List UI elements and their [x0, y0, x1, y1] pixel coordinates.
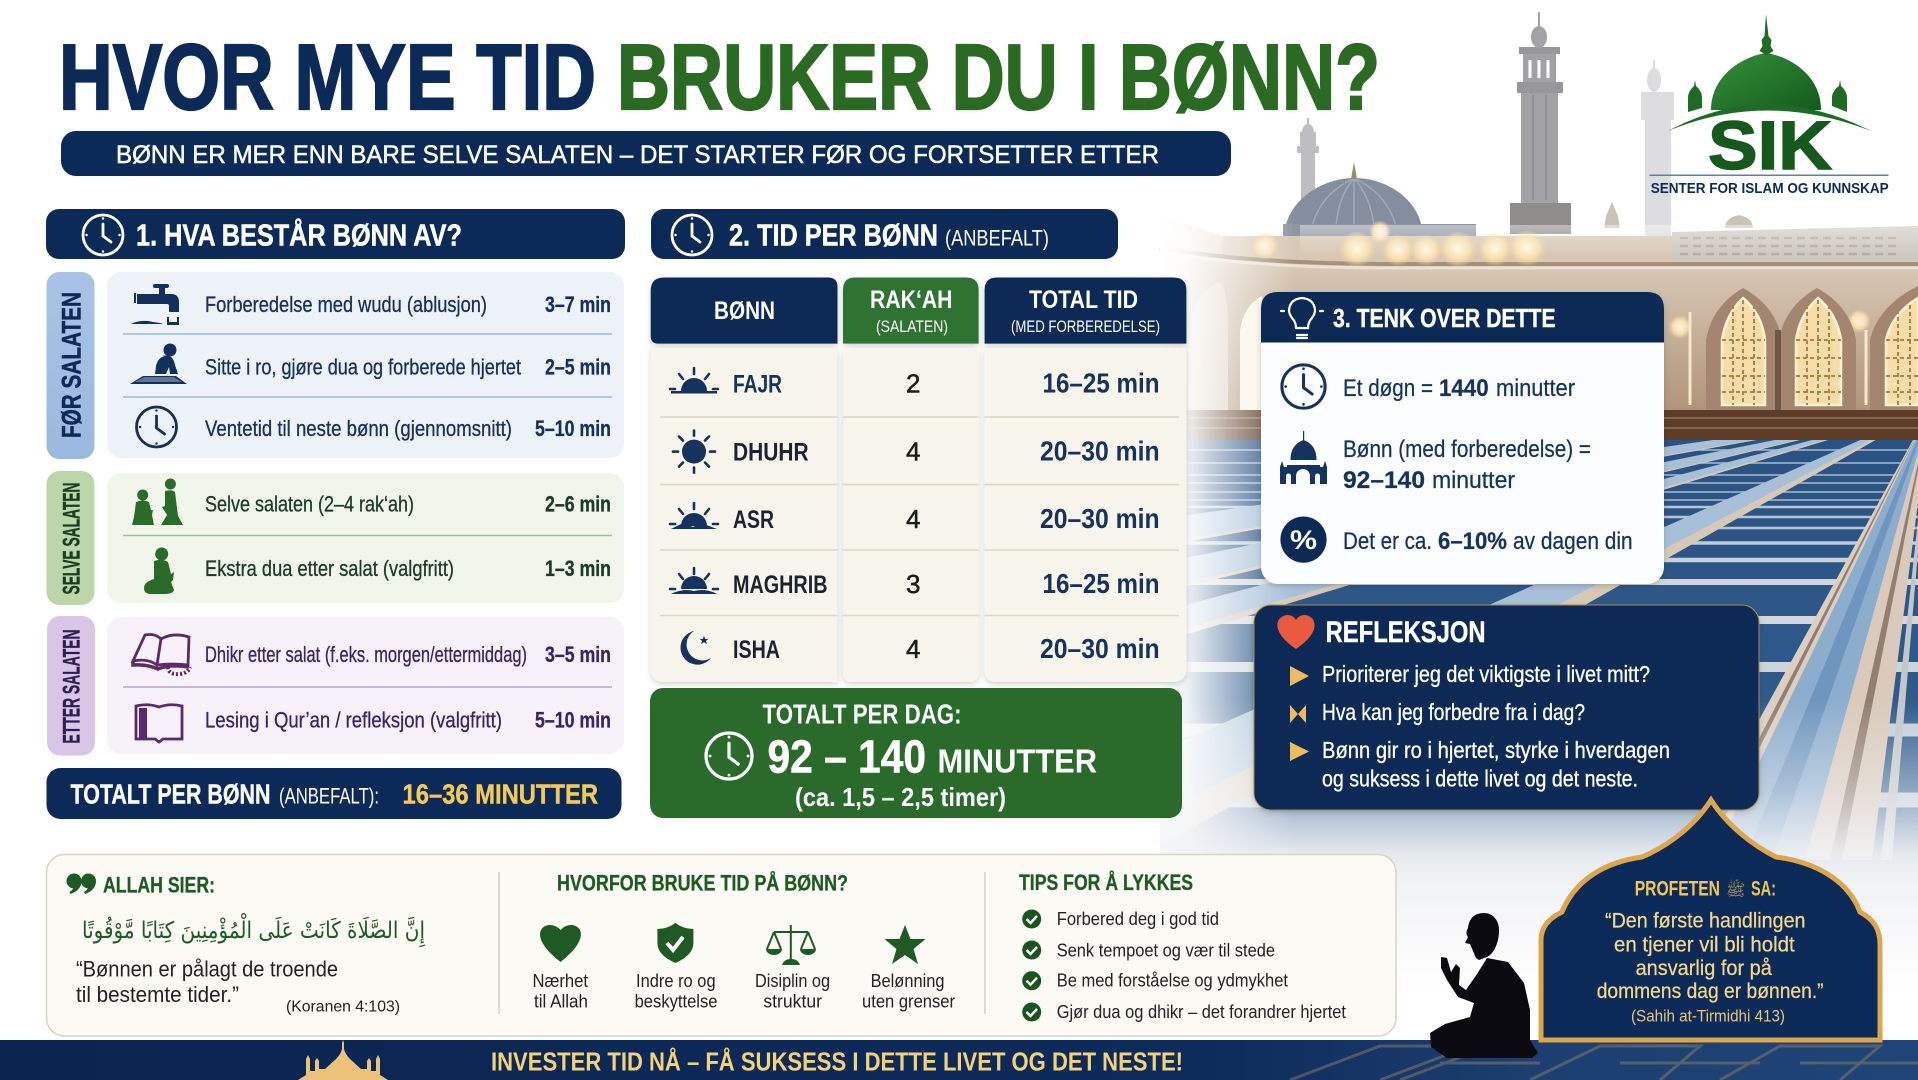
benefit: discipline: struktur: [763, 991, 822, 1012]
quote: allah sier: til bestemte tider.”: [76, 982, 239, 1007]
panel: selve salaten: [46, 471, 624, 605]
reflection question 1: Prioriterer jeg det viktigste i livet mitt?: [1322, 661, 1650, 687]
stripe bundles: [1186, 440, 1876, 792]
tip 4: Gjør dua og dhikr – det forandrer hjertet: [1057, 1002, 1346, 1022]
fact: prayer minutes: [1280, 431, 1591, 494]
arch: prophet quote: PROFETEN: [1635, 878, 1720, 901]
fact: prayer minutes: 92–140: [1343, 467, 1425, 494]
bottom banner: INVESTER TID NÅ – FÅ SUKSESS I DETTE LIVET OG DET NESTE!: [491, 1046, 1183, 1076]
arch: prophet quote: (Sahih at-Tirmidhi 413): [1631, 1007, 1785, 1026]
panel: etter salaten: [47, 616, 624, 756]
icon: clock: [706, 733, 752, 779]
tip 2: Senk tempoet og vær til stede: [1057, 941, 1275, 961]
arch: prophet quote: [1541, 800, 1880, 1040]
reflection statement: og suksess i dette livet og det neste.: [1322, 766, 1638, 792]
icon: moon and star: [681, 631, 711, 665]
quote: allah sier: (Koranen 4:103): [286, 999, 400, 1016]
row: dhikr: 3–5 min: [545, 642, 611, 667]
total per prayer bar: 16–36 MINUTTER: [402, 778, 598, 810]
row: isha: 4: [906, 634, 920, 664]
total per day box: TOTALT PER DAG:: [762, 698, 962, 730]
panel: allah sier / hvorfor / tips: [46, 854, 1396, 1036]
icon: sunset: [670, 568, 718, 594]
benefit: closeness: til Allah: [534, 991, 588, 1012]
why spend time on prayer: [532, 870, 955, 1012]
arch: prophet quote: dommens dag er bønnen.”: [1597, 979, 1824, 1003]
table header: RAK‘AH: [870, 286, 952, 314]
row: isha: ISHA: [733, 636, 780, 664]
tips for success: [1019, 869, 1346, 1022]
tab: selve salaten: SELVE SALATEN: [58, 483, 86, 594]
section 2 heading: 2. TID PER BØNN: [729, 218, 938, 252]
row: wudu: Forberedelse med wudu (ablusjon): [205, 292, 487, 317]
fact: prayer minutes: Bønn (med forberedelse) =: [1343, 436, 1591, 463]
total per prayer bar: [46, 768, 622, 819]
fact: percent of day: av dagen din: [1513, 528, 1633, 555]
fact: minutes per day: minutter: [1496, 375, 1575, 402]
fact: minutes per day: 1440: [1439, 375, 1489, 402]
title: BRUKER DU I BØNN?: [617, 25, 1380, 129]
row: lesing: 5–10 min: [535, 708, 611, 732]
panel: refleksjon: REFLEKSJON: [1326, 616, 1486, 649]
row: fajr: 2: [906, 369, 920, 399]
steps: [1160, 410, 1918, 441]
fact: minutes per day: [1282, 365, 1575, 408]
arch: prophet quote: ansvarlig for på: [1636, 956, 1772, 980]
total per day box: MINUTTER: [938, 742, 1097, 780]
icon: green dome: [1668, 14, 1871, 131]
benefit: inner peace: beskyttelse: [635, 991, 718, 1012]
benefit: closeness: Nærhet: [532, 970, 588, 991]
icon: book: [136, 705, 182, 742]
arch: prophet quote: SA:: [1751, 878, 1776, 901]
row: maghrib: [670, 568, 1160, 599]
fact: percent of day: [1280, 517, 1633, 563]
row: selve salaten: Selve salaten (2–4 rak‘ah): [205, 492, 414, 516]
pale left arch: [1188, 282, 1262, 430]
row: lesing: Lesing i Qur’an / refleksjon (valgfritt): [205, 708, 502, 732]
minaret: far left: [1297, 118, 1319, 212]
row: wudu: 3–7 min: [545, 292, 611, 317]
row: dhuhr: DHUHR: [733, 439, 809, 467]
row: maghrib: MAGHRIB: [733, 571, 828, 599]
balustrade lamps: [1251, 220, 1871, 339]
row: asr: 20–30 min: [1040, 503, 1160, 534]
minaret: centre: [1510, 12, 1571, 234]
fact: prayer minutes: minutter: [1432, 467, 1515, 494]
table body: [651, 348, 1186, 682]
quote: allah sier: إِنَّ الصَّلَاةَ كَانَتْ عَلَى الْمُؤْمِنِينَ كِتَابًا مَّوْقُوتًا: [82, 912, 426, 948]
fact: minutes per day: Et døgn =: [1343, 375, 1433, 402]
benefit: discipline: Disiplin og: [755, 970, 830, 991]
tip 3: Be med forståelse og ydmykhet: [1057, 971, 1288, 991]
glowing arched windows: [1690, 286, 1918, 410]
subtitle bar: [61, 131, 1231, 176]
row: ekstra dua: 1–3 min: [545, 556, 611, 581]
row: selve salaten: 2–6 min: [545, 492, 611, 516]
tab: selve salaten: [46, 471, 94, 605]
tab: før salaten: [46, 272, 94, 459]
row: fajr: 16–25 min: [1042, 368, 1160, 399]
section 1 heading: [46, 209, 625, 259]
icon: dawn: [670, 368, 718, 394]
tab: etter salaten: [47, 616, 95, 756]
panel 3 heading: 3. TENK OVER DETTE: [1333, 303, 1556, 333]
building wall: [1160, 215, 1918, 412]
background: mosque scene: [1160, 12, 1918, 926]
table header: (MED FORBEREDELSE): [1011, 317, 1160, 336]
row: maghrib: 3: [906, 569, 920, 599]
subtitle bar: BØNN ER MER ENN BARE SELVE SALATEN – DET STARTER FØR OG FORTSETTER ETTER: [116, 141, 1159, 169]
icon: gold mosque: [298, 1040, 388, 1080]
row: ventetid: Ventetid til neste bønn (gjennomsnitt): [205, 416, 512, 441]
panel: før salaten: [46, 272, 624, 459]
row: dhuhr: [673, 431, 1160, 473]
benefit: discipline: [755, 925, 830, 1012]
logo: SIK: [1650, 14, 1889, 197]
small roof turrets: [1604, 202, 1753, 228]
benefit: reward: Belønning: [871, 970, 944, 991]
panel: tenk over dette: [1261, 292, 1664, 584]
carpet: [1173, 440, 1918, 864]
icon: heart: [1277, 615, 1315, 649]
section 2 heading: (ANBEFALT): [945, 226, 1049, 250]
section 2 heading: [651, 209, 1118, 259]
icon: faucet: [131, 284, 179, 325]
table header: TOTAL TID: [1029, 286, 1138, 314]
table header: [651, 278, 1186, 344]
panel 3 heading: [1261, 292, 1664, 342]
title: HVOR MYE TID: [59, 25, 596, 129]
row: isha: [681, 631, 1160, 665]
icon: afternoon sun: [670, 503, 718, 529]
icon: mosque: [1280, 431, 1327, 484]
carpet pattern: [1290, 1046, 1918, 1080]
benefit: closeness: [532, 925, 588, 1012]
icon: sun: [673, 431, 715, 473]
tip 1: Forbered deg i god tid: [1057, 909, 1219, 929]
row: ekstra dua: Ekstra dua etter salat (valgfritt): [205, 556, 454, 581]
row: sitte i ro: 2–5 min: [545, 354, 611, 380]
tab: før salaten: FØR SALATEN: [56, 292, 86, 438]
total per prayer bar: (ANBEFALT):: [279, 784, 379, 808]
main dome: [1283, 162, 1476, 238]
scene fades: [1160, 170, 1918, 990]
row: isha: 20–30 min: [1040, 633, 1160, 664]
fact: percent of day: 6–10%: [1438, 528, 1507, 555]
icon: two praying people: [132, 478, 183, 525]
benefit: inner peace: Indre ro og: [636, 970, 716, 991]
row: fajr: FAJR: [733, 371, 782, 399]
reflection statement: [1290, 737, 1670, 792]
quote: allah sier: [66, 873, 426, 1016]
row: ventetid: 5–10 min: [535, 416, 611, 441]
icon: person on mat: [130, 344, 187, 384]
fact: percent of day: Det er ca.: [1343, 528, 1432, 555]
quote: allah sier: “Bønnen er pålagt de troende: [76, 957, 338, 982]
arch: prophet quote: en tjener vil bli holdt: [1614, 933, 1795, 957]
icon: light bulb: [1281, 298, 1323, 338]
icon: quotation mark: [66, 874, 96, 894]
icon: open book with beads: [133, 634, 190, 674]
total per day box: 92 – 140: [768, 730, 926, 782]
logo: SIK: SENTER FOR ISLAM OG KUNNSKAP: [1651, 180, 1889, 197]
row: fajr: [670, 368, 1160, 399]
row: dhikr: Dhikr etter salat (f.eks. morgen/ettermiddag): [205, 642, 527, 667]
total per day box: [650, 688, 1182, 818]
row: maghrib: 16–25 min: [1042, 568, 1160, 599]
icon: clock: [136, 407, 176, 447]
prayer time table: [651, 278, 1186, 682]
reflection question 2: Hva kan jeg forbedre fra i dag?: [1322, 699, 1585, 725]
table header: (SALATEN): [876, 317, 948, 336]
total per prayer bar: TOTALT PER BØNN: [70, 778, 270, 810]
fact: percent of day: %: [1290, 525, 1317, 555]
minaret: right, faded: [1641, 60, 1674, 236]
table header: BØNN: [714, 297, 775, 325]
quote: allah sier: ALLAH SIER:: [103, 873, 215, 898]
logo: SIK: SIK: [1708, 107, 1832, 184]
bottom banner: [0, 1040, 1918, 1080]
row: sitte i ro: Sitte i ro, gjøre dua og forberede hjertet: [205, 354, 521, 380]
total per day box: (ca. 1,5 – 2,5 timer): [795, 782, 1006, 812]
reflection statement: Bønn gir ro i hjertet, styrke i hverdagen: [1322, 737, 1670, 763]
row: dhuhr: 4: [906, 437, 920, 467]
benefit: reward: uten grenser: [862, 991, 955, 1012]
title: [59, 25, 1380, 129]
tab: etter salaten: ETTER SALATEN: [58, 630, 86, 744]
row: selve salaten: [205, 492, 611, 516]
why spend time on prayer: HVORFOR BRUKE TID PÅ BØNN?: [557, 870, 848, 896]
icon: person making dua: [144, 548, 174, 594]
row: asr: 4: [906, 504, 920, 534]
silhouette: praying man: [1430, 913, 1538, 1058]
row: asr: ASR: [733, 506, 774, 534]
benefit: reward: [862, 925, 955, 1012]
tips for success: TIPS FOR Å LYKKES: [1019, 869, 1193, 895]
arch: prophet quote: ﷺ: [1726, 879, 1745, 900]
section 1 heading: 1. HVA BESTÅR BØNN AV?: [136, 218, 462, 252]
arch: prophet quote: “Den første handlingen: [1605, 909, 1806, 933]
panel: refleksjon: [1254, 605, 1759, 810]
row: dhuhr: 20–30 min: [1040, 436, 1160, 467]
row: asr: [670, 503, 1160, 534]
benefit: inner peace: [635, 923, 718, 1012]
